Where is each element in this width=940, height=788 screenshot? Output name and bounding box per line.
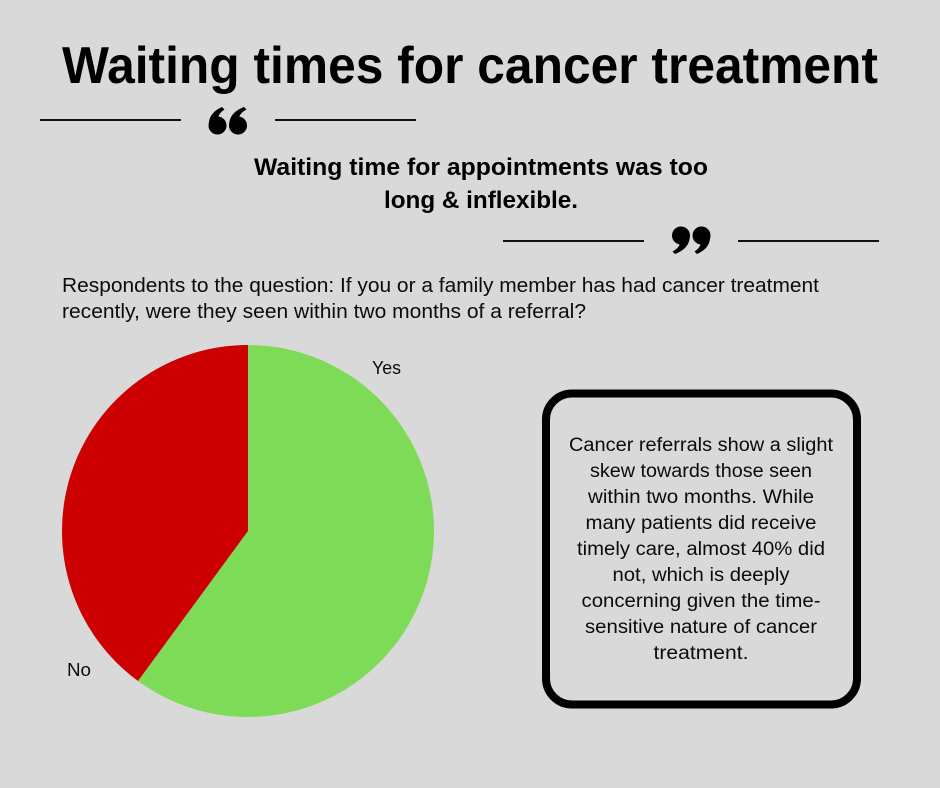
closing quote rule right — [738, 240, 879, 242]
callout panel — [546, 394, 857, 704]
quote text: long & inflexible. — [384, 187, 578, 214]
quote block — [40, 107, 879, 254]
closing quote rule left — [503, 240, 644, 242]
title: Waiting times for cancer treatment — [62, 37, 878, 95]
survey question — [62, 275, 819, 323]
survey question: Respondents to the question: If you or a family member has had cancer treatment — [62, 275, 819, 297]
callout text: Cancer referrals show a slight — [569, 435, 834, 456]
callout text: within two months. While — [587, 487, 814, 508]
callout text: many patients did receive — [586, 513, 816, 534]
callout text — [569, 435, 834, 664]
quote text — [254, 154, 708, 214]
pie chart — [62, 345, 434, 717]
callout text: timely care, almost 40% did — [577, 539, 825, 560]
icon: opening quotation mark — [208, 107, 247, 134]
callout text: treatment. — [654, 643, 748, 664]
callout text: not, which is deeply — [612, 565, 790, 586]
slice: no — [62, 345, 248, 681]
slice: yes — [138, 345, 434, 717]
callout border — [546, 394, 857, 704]
survey question: recently, were they seen within two months of a referral? — [62, 301, 586, 323]
opening quote rule right — [275, 119, 416, 121]
callout text: concerning given the time- — [582, 591, 820, 612]
callout text: sensitive nature of cancer — [585, 617, 818, 638]
callout text: skew towards those seen — [590, 461, 812, 482]
icon: closing quotation mark — [672, 226, 710, 254]
quote text: Waiting time for appointments was too — [254, 154, 708, 181]
label: yes: Yes — [372, 358, 401, 378]
opening quote rule left — [40, 119, 181, 121]
label: no: No — [67, 660, 91, 680]
